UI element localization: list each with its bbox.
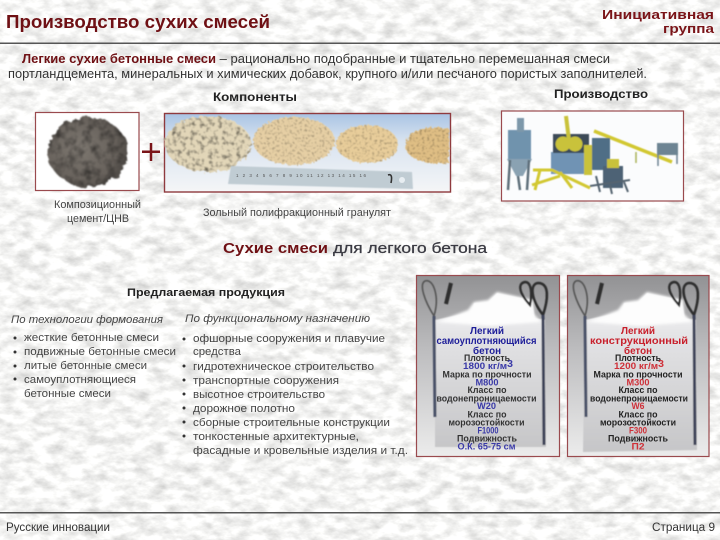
bag label text: Марка по прочности	[442, 370, 532, 380]
photo: cement powder	[36, 112, 139, 190]
section heading: dry mixes: Сухие смеси	[223, 241, 328, 257]
heading: components: Компоненты	[213, 90, 297, 104]
bag label text: морозостойкости	[600, 418, 676, 428]
list: by forming technology: жесткие бетонные смеси	[24, 332, 159, 344]
bag label text: Марка по прочности	[594, 370, 683, 380]
bag label text: М300	[626, 378, 650, 388]
bag label text: конструкционный	[590, 335, 688, 347]
ruler	[228, 166, 413, 189]
bag label text: 1200 кг/м	[614, 361, 656, 372]
bag label text: О.К. 65-75 см	[458, 442, 516, 452]
section heading: dry mixes	[223, 241, 488, 257]
plus sign	[142, 143, 160, 161]
bag label text: W20	[477, 401, 496, 412]
logo text: initiative group: группа	[663, 21, 715, 36]
conveyor	[594, 131, 672, 162]
footer: organisation: Русские инновации	[6, 522, 110, 534]
caption: composite cement	[54, 199, 141, 225]
bag label text: F300	[629, 426, 647, 436]
list: by functional purpose: офшорные сооружения и плавучие	[193, 333, 385, 345]
bag label text	[590, 325, 688, 452]
bag label text: самоуплотняющийся	[436, 335, 536, 347]
bag label text: М800	[476, 378, 498, 388]
list: by functional purpose: тонкостенные архитектурные,	[193, 431, 359, 443]
photo: production plant	[502, 111, 684, 201]
bag label text: Подвижность	[457, 434, 517, 444]
footer: page number: Страница 9	[652, 522, 715, 534]
granule piles	[165, 116, 449, 172]
bag label text: Класс по	[618, 385, 658, 396]
list: by forming technology: По технологии формования	[11, 314, 163, 326]
list: by forming technology	[11, 314, 176, 400]
title: Производство сухих смесей	[6, 11, 270, 32]
list: by functional purpose: По функциональному назначению	[185, 313, 370, 325]
bag label text: F1000	[478, 426, 498, 436]
list: by forming technology: литые бетонные смеси	[24, 360, 147, 372]
ruler: 1 2 3 4 5 6 7 8 9 10 11 12 13 14 15 16	[236, 173, 366, 178]
section heading: dry mixes: для легкого бетона	[333, 241, 488, 257]
lower plant	[584, 145, 592, 175]
photo: fly ash granules and ruler	[164, 114, 450, 192]
bag label text: 3	[507, 359, 513, 370]
bag label text: бетон	[473, 345, 501, 357]
bag label text: Класс по	[468, 385, 507, 396]
list: by functional purpose: дорожное полотно	[193, 403, 295, 415]
list: by functional purpose	[182, 313, 408, 457]
bag label text: водонепроницаемости	[436, 394, 537, 404]
list: by functional purpose: транспортные сооружения	[193, 375, 339, 387]
list: by functional purpose: сборные строительные конструкции	[193, 417, 390, 429]
silo	[508, 130, 531, 160]
intro text: Легкие сухие бетонные смеси – рационально подобранные и тщательно перемешанная смеси	[22, 52, 610, 66]
bag label text: 1800 кг/м	[463, 361, 505, 372]
caption: composite cement: Композиционный	[54, 199, 141, 211]
intro text: портландцемента, минеральных и химических добавок, крупного и/или песчаного пористых заполнителей.	[8, 67, 647, 81]
hopper	[657, 143, 678, 155]
mixing tower	[551, 152, 585, 174]
bag label text: 3	[658, 359, 664, 370]
bag label text: W6	[632, 401, 644, 412]
bag label text: Подвижность	[608, 434, 668, 444]
bag label text: П2	[632, 442, 644, 452]
bag label text: Класс по	[618, 410, 658, 420]
list: by forming technology: бетонные смеси	[24, 388, 111, 400]
bag label text: морозостойкости	[448, 418, 525, 428]
list: by forming technology: самоуплотняющиеся	[24, 374, 136, 386]
bag: lightweight self-compacting concrete	[416, 276, 560, 456]
list: by functional purpose: средства	[193, 346, 242, 358]
list: by functional purpose: гидротехническое строительство	[193, 361, 374, 373]
heading: production: Производство	[554, 87, 648, 101]
caption: composite cement: цемент/ЦНВ	[67, 213, 129, 225]
heading: offered products: Предлагаемая продукция	[127, 287, 285, 299]
bag label text: Плотность	[615, 353, 661, 364]
bag label text: Легкий	[470, 325, 504, 337]
bag label text: Класс по	[468, 410, 507, 420]
caption: granules: Зольный полифракционный гранулят	[203, 207, 391, 219]
logo text: initiative group	[602, 7, 715, 36]
bag label text: водонепроницаемости	[590, 394, 688, 404]
bag label text: бетон	[624, 345, 652, 357]
list: by forming technology: подвижные бетонные смеси	[24, 346, 176, 358]
list: by functional purpose: фасадные и кровельные изделия и т.д.	[193, 445, 408, 457]
logo text: initiative group: Инициативная	[602, 7, 714, 22]
bag: lightweight structural concrete	[568, 276, 709, 456]
bag label text: Плотность	[464, 353, 510, 364]
bag label text	[436, 325, 537, 452]
intro text	[8, 52, 647, 81]
bag label text: Легкий	[621, 325, 655, 337]
list: by functional purpose: высотное строительство	[193, 389, 325, 401]
